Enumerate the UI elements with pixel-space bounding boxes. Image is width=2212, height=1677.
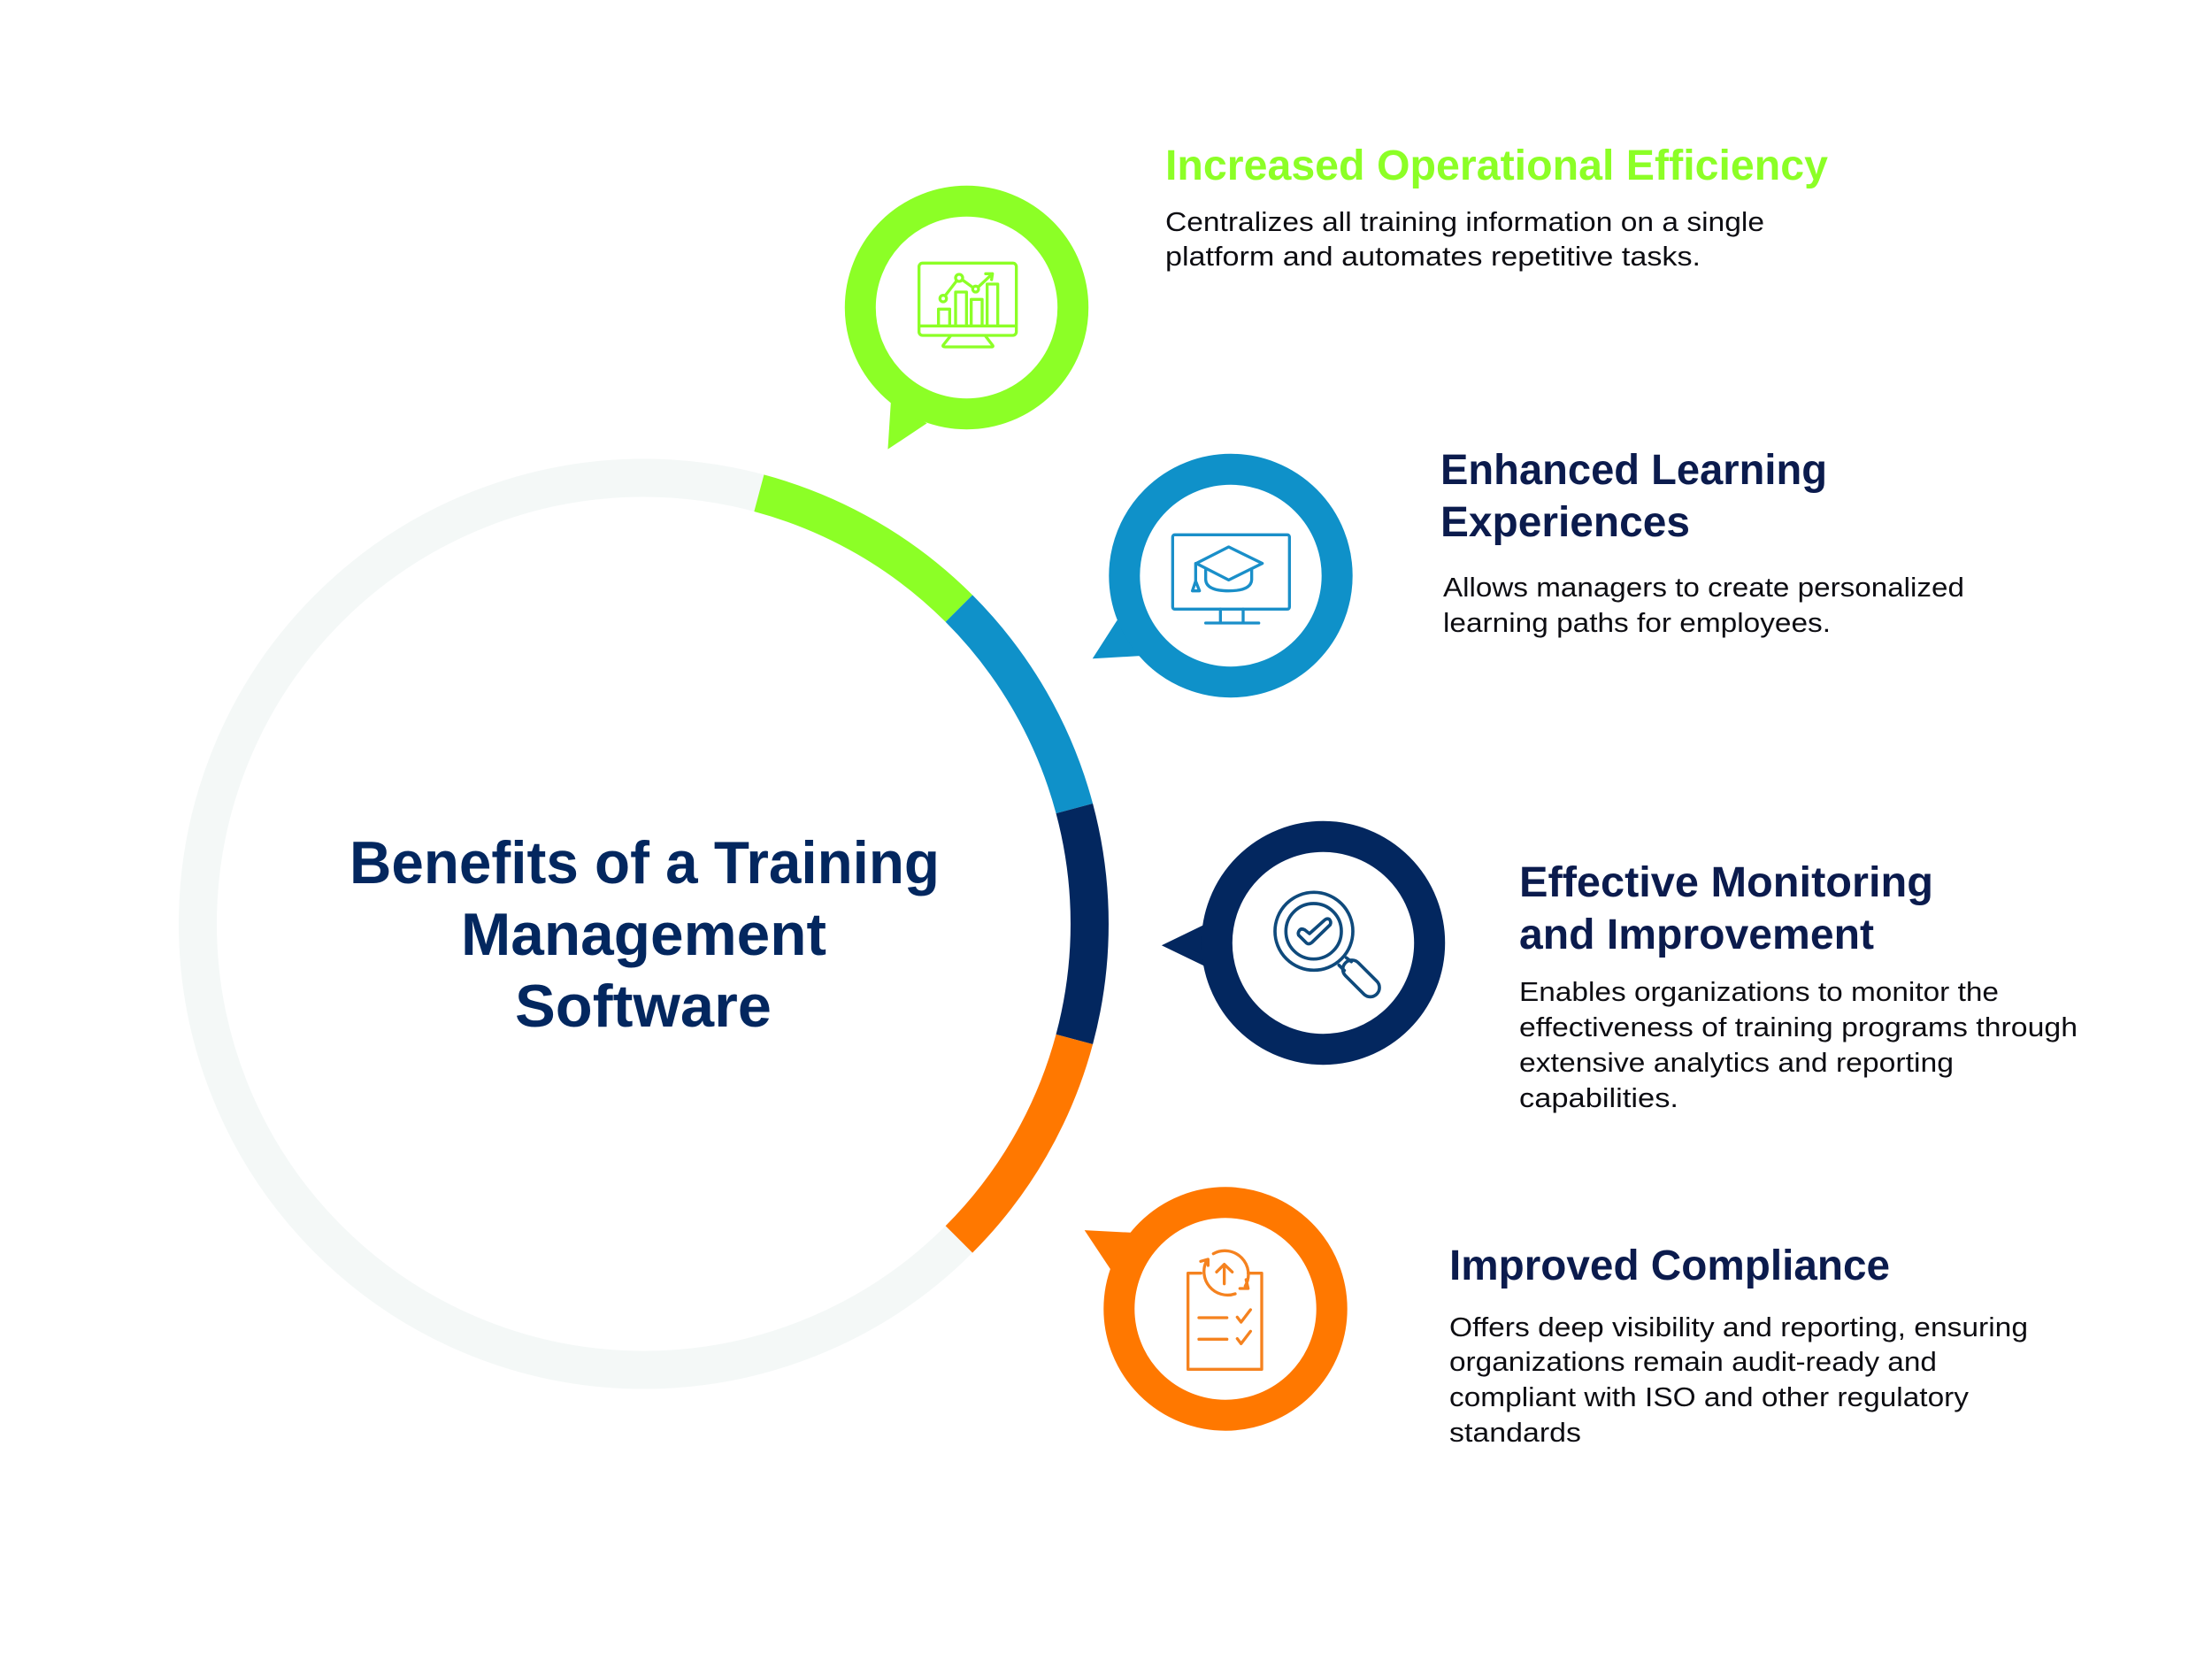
icon: monitor with bar chart	[919, 263, 1017, 347]
title: Management	[461, 901, 826, 968]
heading: Enhanced Learning Experiences: Enhanced Learning	[1440, 447, 1827, 494]
text block: monitoring description: effectiveness of training programs through	[1519, 1012, 2078, 1042]
speech bubble: operational efficiency	[860, 201, 1073, 449]
title: Software	[515, 973, 772, 1040]
text block: compliance description: organizations remain audit-ready and	[1449, 1346, 1937, 1377]
title: Benefits of a Training	[349, 829, 940, 896]
heading: Enhanced Learning Experiences: Experiences	[1440, 499, 1690, 546]
text block: efficiency description: platform and automates repetitive tasks.	[1165, 241, 1701, 272]
text block: compliance description: compliant with ISO and other regulatory	[1449, 1381, 1970, 1412]
ring chart: four benefit segments	[198, 478, 1090, 1370]
text block: efficiency description: Centralizes all training information on a single	[1165, 206, 1764, 237]
speech bubble: monitoring and improvement	[1163, 836, 1430, 1050]
text block: learning description: Allows managers to create personalized	[1443, 572, 1964, 603]
heading: Effective Monitoring and Improvement	[1519, 859, 1933, 958]
text block: efficiency description	[1165, 206, 1764, 272]
text block: compliance description: Offers deep visibility and reporting, ensuring	[1449, 1312, 2028, 1342]
heading: Improved Compliance: Improved Compliance	[1449, 1242, 1890, 1289]
text block: monitoring description: capabilities.	[1519, 1082, 1678, 1113]
heading: Effective Monitoring and Improvement: Effective Monitoring	[1519, 859, 1933, 906]
text block: monitoring description	[1519, 976, 2078, 1113]
icon: clipboard with checks and update arrows	[1188, 1250, 1262, 1369]
speech bubble: learning experiences	[1094, 469, 1337, 682]
heading: Increased Operational Efficiency: Increased Operational Efficiency	[1165, 142, 1828, 189]
heading: Enhanced Learning Experiences	[1440, 447, 1827, 546]
text block: compliance description: standards	[1449, 1417, 1581, 1448]
text block: monitoring description: extensive analytics and reporting	[1519, 1047, 1954, 1078]
icon: magnifying glass with check	[1275, 892, 1383, 1001]
text block: learning description	[1443, 572, 1964, 638]
icon: monitor with graduation cap	[1172, 535, 1289, 623]
text block: learning description: learning paths for employees.	[1443, 607, 1831, 638]
text block: monitoring description: Enables organizations to monitor the	[1519, 976, 1999, 1007]
heading: Effective Monitoring and Improvement: and Improvement	[1519, 912, 1874, 958]
title	[349, 829, 940, 1040]
speech bubble: improved compliance	[1086, 1203, 1332, 1415]
text block: compliance description	[1449, 1312, 2028, 1448]
